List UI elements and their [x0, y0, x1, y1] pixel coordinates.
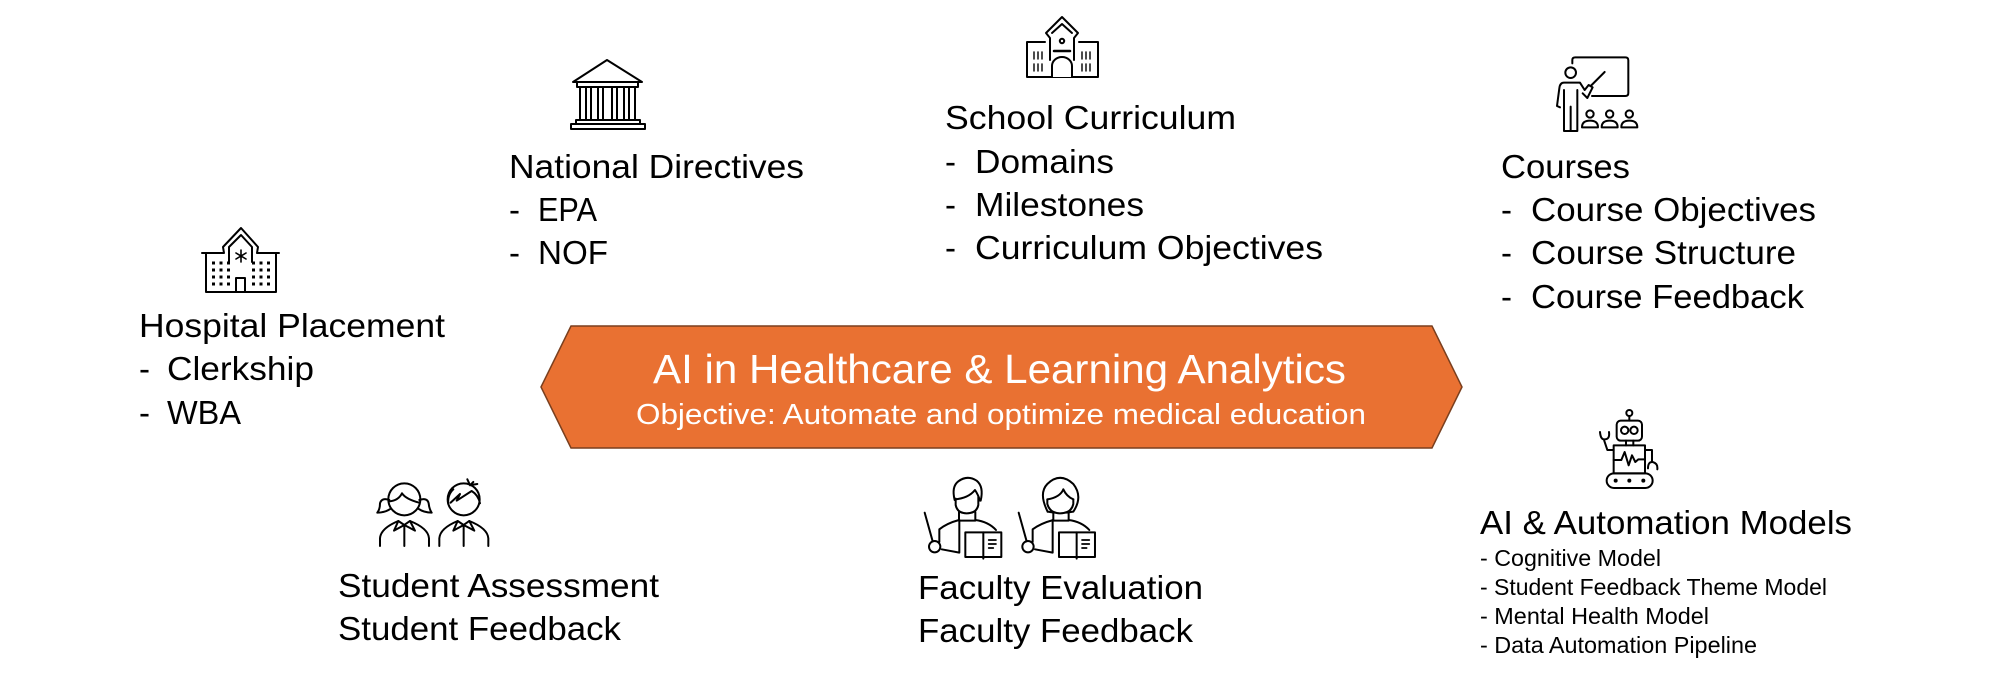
icon: hospital building: [202, 228, 279, 292]
banner objective: Objective: Automate and optimize medical education: [636, 399, 1366, 431]
icon: faculty members: [925, 478, 1095, 559]
text block: courses: -: [1501, 191, 1512, 228]
text block: school curriculum: -: [945, 186, 956, 223]
text block: ai and automation models: - Data Automation Pipeline: [1480, 632, 1757, 658]
text block: ai and automation models: [1480, 504, 1852, 658]
text block: ai and automation models: - Cognitive Model: [1480, 545, 1661, 571]
text block: school curriculum: Domains: [975, 143, 1114, 180]
text block: hospital placement: -: [139, 350, 150, 387]
text block: national directives: National Directives: [509, 148, 804, 185]
text block: ai and automation models: - Student Feedback Theme Model: [1480, 574, 1827, 600]
text block: courses: [1501, 148, 1816, 315]
text block: school curriculum: Milestones: [975, 186, 1144, 223]
hexagon shape: [541, 326, 1462, 448]
text block: national directives: NOF: [538, 234, 608, 271]
text block: faculty evaluation: Faculty Evaluation: [918, 569, 1203, 606]
text block: courses: -: [1501, 234, 1512, 271]
text block: courses: Course Structure: [1531, 234, 1796, 271]
text block: courses: Course Objectives: [1531, 191, 1816, 228]
text block: faculty evaluation: Faculty Feedback: [918, 612, 1194, 649]
icon: students: [377, 479, 488, 546]
text block: school curriculum: -: [945, 143, 956, 180]
icon: robot: [1600, 410, 1657, 488]
text block: national directives: -: [509, 191, 520, 228]
icon: teacher at blackboard: [1557, 57, 1637, 131]
text block: hospital placement: Clerkship: [167, 350, 314, 387]
icon: school building: [1027, 17, 1098, 77]
text block: hospital placement: [139, 307, 445, 431]
banner title: AI in Healthcare & Learning Analytics: [653, 346, 1346, 392]
text block: ai and automation models: - Mental Health Model: [1480, 603, 1709, 629]
text block: national directives: -: [509, 234, 520, 271]
text block: courses: Course Feedback: [1531, 278, 1805, 315]
text block: hospital placement: -: [139, 394, 150, 431]
text block: school curriculum: [945, 99, 1323, 266]
text block: student assessment: Student Assessment: [338, 567, 659, 604]
central banner: [541, 326, 1462, 448]
text block: courses: Courses: [1501, 148, 1630, 185]
text block: hospital placement: WBA: [167, 394, 241, 431]
icon: bank national directives: [571, 60, 645, 129]
text block: ai and automation models: AI & Automation Models: [1480, 504, 1852, 541]
text block: national directives: [509, 148, 804, 271]
text block: student assessment: Student Feedback: [338, 610, 622, 647]
text block: hospital placement: Hospital Placement: [139, 307, 445, 344]
text block: school curriculum: -: [945, 229, 956, 266]
text block: school curriculum: Curriculum Objectives: [975, 229, 1323, 266]
text block: school curriculum: School Curriculum: [945, 99, 1236, 136]
text block: national directives: EPA: [538, 191, 597, 228]
text block: courses: -: [1501, 278, 1512, 315]
text block: student assessment: [338, 567, 659, 647]
text block: faculty evaluation: [918, 569, 1203, 649]
